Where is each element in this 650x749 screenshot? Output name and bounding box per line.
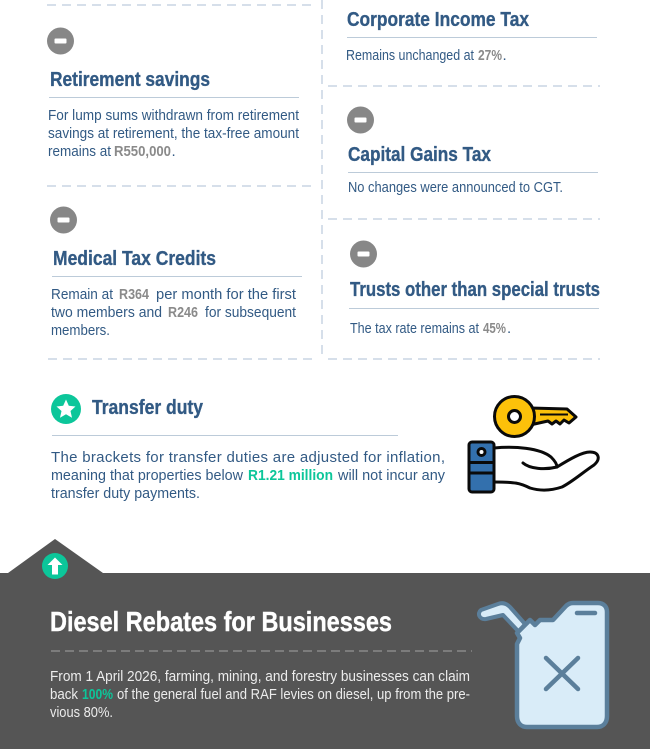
icon: up arrow badge: [42, 553, 68, 579]
icon: no change: [47, 28, 74, 54]
text: diesel detail: back: [50, 686, 78, 703]
icon: jerry can: [479, 603, 607, 727]
text: trusts detail: 45%: [483, 320, 506, 337]
text: transfer duty detail: transfer duty payments.: [51, 485, 200, 502]
heading: capital gains tax: Capital Gains Tax: [348, 143, 491, 166]
icon: no change: [50, 206, 77, 234]
text: transfer duty detail: The brackets for transfer duties are adjusted for inflation,: [51, 449, 445, 466]
heading: diesel rebates: Diesel Rebates for Businesses: [50, 606, 392, 637]
text: capital gains tax detail: No changes were announced to CGT.: [348, 179, 563, 196]
heading: transfer duty: Transfer duty: [92, 396, 204, 419]
panel: corporate income tax: [346, 8, 597, 64]
text: transfer duty detail: will not incur any: [337, 467, 445, 484]
heading: medical tax credits: Medical Tax Credits: [53, 247, 216, 270]
text: medical tax credits detail: Remain at: [51, 286, 114, 303]
text: diesel detail: 100%: [82, 686, 113, 703]
heading: trusts: Trusts other than special trusts: [350, 278, 600, 301]
text: transfer duty detail: R1.21 million: [248, 467, 333, 484]
text: medical tax credits detail: for subsequent: [205, 304, 297, 321]
text: retirement savings detail: [48, 107, 300, 160]
text: medical tax credits detail: R246: [168, 304, 198, 321]
text: transfer duty detail: [51, 449, 445, 502]
text: retirement savings detail: For lump sums withdrawn from retirement: [48, 107, 300, 124]
heading: corporate income tax: Corporate Income Tax: [347, 8, 530, 31]
text: medical tax credits detail: [51, 286, 297, 339]
text: corporate income tax detail: .: [502, 47, 507, 64]
text: trusts detail: .: [507, 320, 511, 337]
text: retirement savings detail: R550,000: [114, 143, 171, 160]
panel: transfer duty: [51, 394, 598, 502]
panel: capital gains tax: [347, 106, 598, 196]
icon: no change: [350, 240, 377, 268]
text: retirement savings detail: remains at: [48, 143, 112, 160]
text: diesel detail: [50, 668, 470, 721]
icon: key: [494, 396, 576, 436]
text: diesel detail: of the general fuel and RAF levies on diesel, up from the pre-: [117, 686, 470, 703]
icon: star badge: [51, 394, 81, 424]
panel: retirement savings: [47, 28, 300, 160]
panel: medical tax credits: [50, 206, 302, 339]
icon: no change: [347, 106, 374, 134]
panel: trusts other than special trusts: [349, 240, 600, 337]
icon: hand: [469, 442, 598, 492]
text: medical tax credits detail: per month for the first: [156, 286, 297, 303]
text: trusts detail: The tax rate remains at: [350, 320, 480, 337]
text: retirement savings detail: savings at retirement, the tax-free amount: [48, 125, 300, 142]
text: medical tax credits detail: R364: [119, 286, 150, 303]
text: corporate income tax detail: Remains unchanged at: [346, 47, 475, 64]
banner background: [0, 539, 650, 749]
text: diesel detail: vious 80%.: [50, 704, 113, 721]
panel: diesel rebates: [0, 539, 650, 749]
text: medical tax credits detail: two members and: [51, 304, 162, 321]
heading: retirement savings: Retirement savings: [50, 68, 210, 91]
text: retirement savings detail: .: [172, 143, 176, 160]
text: diesel detail: From 1 April 2026, farming, mining, and forestry businesses can claim: [50, 668, 470, 685]
text: transfer duty detail: meaning that properties below: [51, 467, 243, 484]
text: medical tax credits detail: members.: [51, 322, 110, 339]
text: corporate income tax detail: 27%: [478, 47, 502, 64]
